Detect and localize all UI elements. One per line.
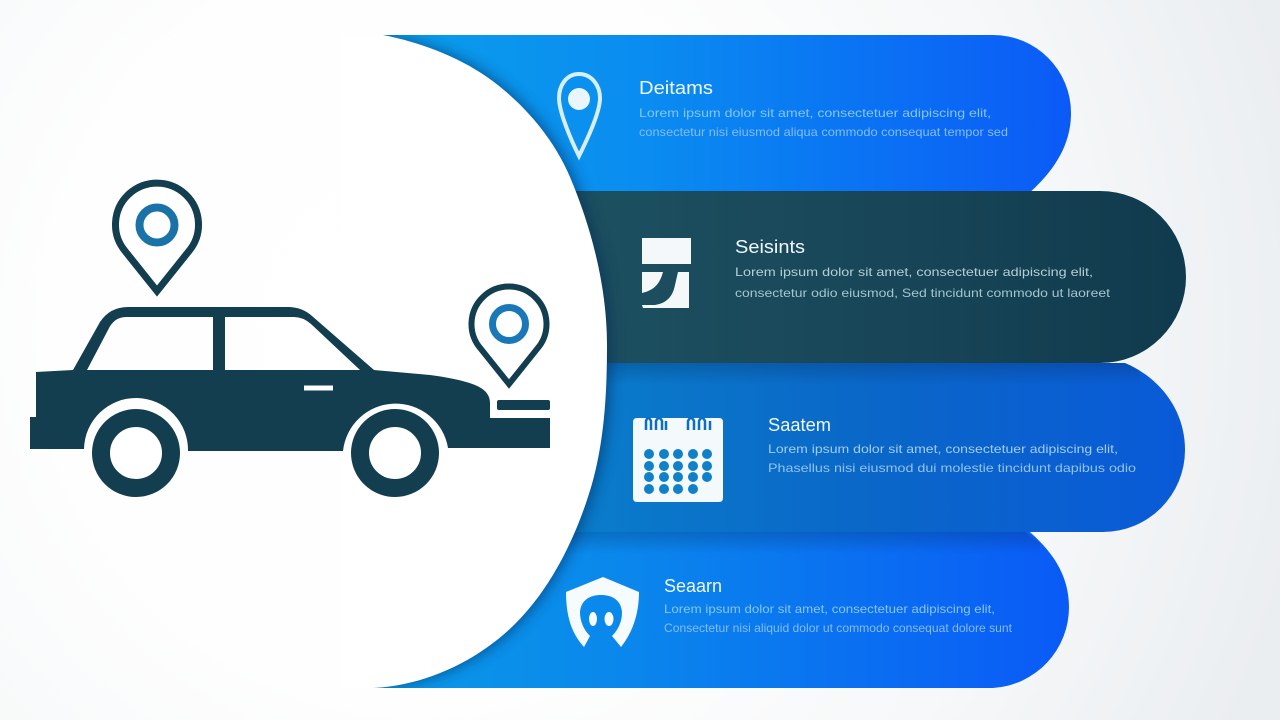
text: Seats: consectetur odio eiusmod, Sed tincidunt commodo ut laoreet [735,286,1111,300]
text: Safety: Lorem ipsum dolor sit amet, consectetuer adipiscing elit, [664,602,995,616]
text: Schedule: Lorem ipsum dolor sit amet, consectetuer adipiscing elit, [768,442,1118,456]
text: Seats: Lorem ipsum dolor sit amet, consectetuer adipiscing elit, [735,265,1093,279]
panel edge shading [400,363,1140,554]
panel: Seats background [500,191,1186,363]
panel: Details background [360,35,1071,195]
text: Details: Lorem ipsum dolor sit amet, consectetuer adipiscing elit, [639,106,991,120]
map pin above the hood [472,287,546,384]
icon: shield [566,577,639,647]
text: Details [639,78,1008,139]
front wheel [360,418,430,488]
car front bumper [497,400,550,410]
text: Seats: Seisints [735,237,805,257]
text: Details: consectetur nisi eiusmod aliqua commodo consequat tempor sed [639,125,1008,139]
text: Safety [664,576,1013,635]
panel: Safety background [360,528,1069,688]
text: Seats [735,237,1111,300]
white shape edge shadow [344,35,611,688]
icon: calendar [633,418,723,502]
panel: Schedule background [500,363,1185,532]
text: Safety: Seaarn [664,576,722,596]
white shape [340,35,607,688]
text: Schedule [768,415,1136,475]
icon: location pin [559,74,600,156]
text: Schedule: Saatem [768,415,831,435]
text: Schedule: Phasellus nisi eiusmod dui molestie tincidunt dapibus odio [768,461,1136,475]
car illustration [30,307,550,488]
map pin above the roof [115,183,198,291]
rear wheel [101,418,171,488]
icon: document [642,238,691,308]
text: Safety: Consectetur nisi aliquid dolor ut commodo consequat dolore sunt [664,621,1013,635]
car body [30,307,550,451]
text: Details: Deitams [639,78,713,98]
